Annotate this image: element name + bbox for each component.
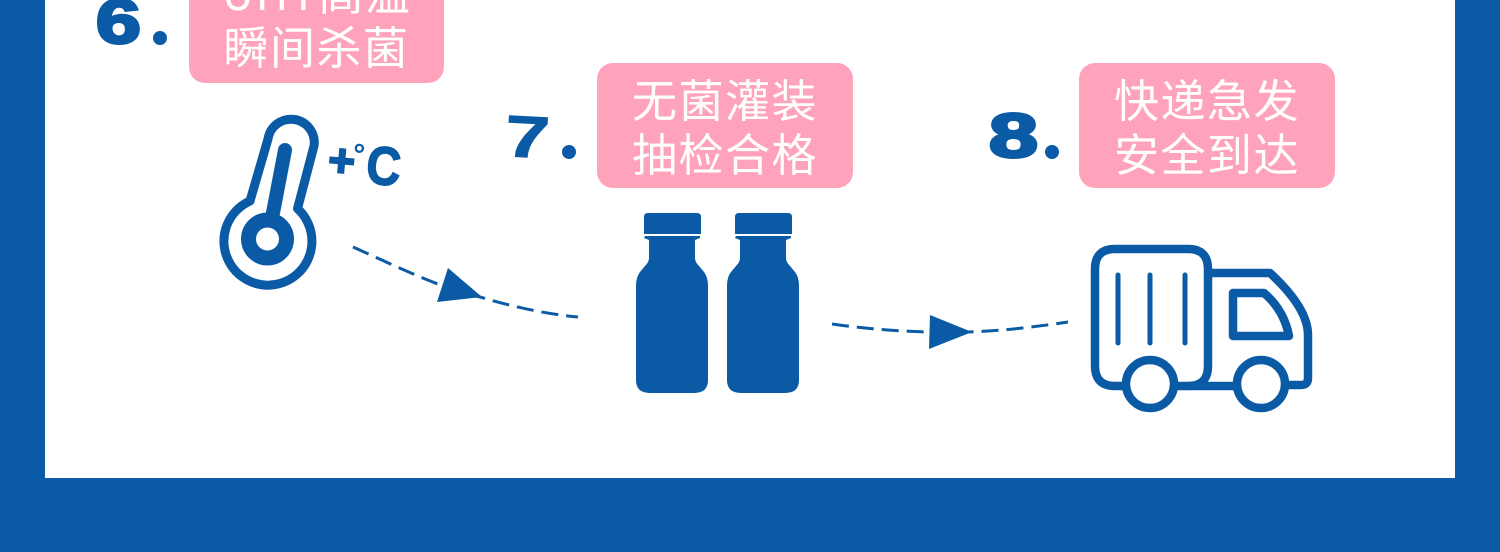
step 6 label	[189, 0, 444, 83]
plus degrees celsius	[326, 133, 403, 198]
arrow: step 6 to step 7	[353, 247, 578, 317]
icon: thermometer	[224, 119, 314, 285]
step 7 label: 无菌灌装	[632, 65, 818, 130]
number 8: 8	[989, 102, 1038, 171]
bottle left	[636, 213, 708, 393]
icon: two bottles	[636, 213, 799, 393]
step 8 label	[1079, 63, 1335, 188]
number 8	[989, 102, 1059, 171]
plus degrees celsius: C	[364, 134, 403, 198]
plus degrees celsius: +	[326, 133, 357, 187]
arrow: step 7 to step 8	[832, 315, 1068, 349]
step 8 label: 安全到达	[1114, 119, 1300, 184]
step 6 label: 瞬间杀菌	[223, 12, 410, 77]
icon: delivery truck	[1095, 249, 1308, 408]
step 7 label	[597, 63, 853, 188]
plus degrees celsius: °	[351, 138, 366, 172]
number 6	[96, 0, 167, 57]
step 8 label: 快递急发	[1114, 65, 1300, 130]
number 7	[503, 103, 576, 171]
number 7: 7	[503, 103, 552, 171]
step 7 label: 抽检合格	[632, 119, 818, 184]
bottle right	[727, 213, 799, 393]
